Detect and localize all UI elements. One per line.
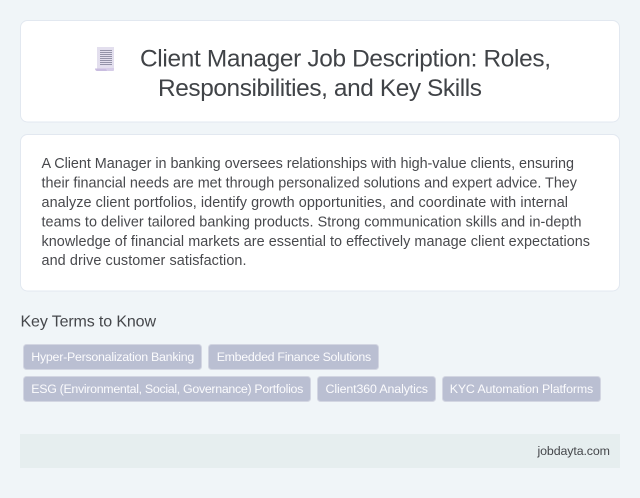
footer	[20, 434, 620, 468]
tag: Hyper-Personalization Banking	[24, 344, 202, 370]
tag: Client360 Analytics	[318, 376, 436, 402]
icon: document scroll	[95, 47, 114, 71]
panel: description	[20, 134, 620, 291]
tag: Hyper-Personalization Banking: Hyper-Personalization Banking	[31, 350, 194, 364]
text block: description	[42, 156, 590, 269]
text block: description: teams to deliver tailored banking products. Strong communication skills and in-depth	[42, 214, 582, 230]
tag: Embedded Finance Solutions: Embedded Finance Solutions	[217, 350, 371, 364]
tag: Embedded Finance Solutions	[208, 344, 378, 370]
text block: description: A Client Manager in banking oversees relationships with high-value clients, ensuring	[42, 156, 574, 172]
text block: description: knowledge of financial markets are essential to effectively manage client expectations	[42, 234, 590, 250]
heading: key terms: Key Terms to Know	[20, 314, 156, 330]
panel: title card	[20, 20, 620, 122]
tag: Client360 Analytics: Client360 Analytics	[326, 382, 428, 396]
text block: description: and drive customer satisfaction.	[42, 253, 246, 269]
tag: ESG Portfolios: ESG (Environmental, Social, Governance) Portfolios	[31, 382, 303, 396]
title: Responsibilities, and Key Skills	[158, 75, 482, 102]
footer: jobdayta.com	[536, 444, 610, 458]
tag: ESG Portfolios	[24, 376, 310, 402]
text block: description: their financial needs are met through personalized solutions and expert advice. They	[42, 176, 578, 192]
tag: KYC Automation Platforms: KYC Automation Platforms	[450, 382, 593, 396]
text block: description: analyze client portfolios, identify growth opportunities, and coordinate with internal	[42, 195, 568, 211]
title: Client Manager Job Description: Roles,	[140, 46, 551, 72]
title	[140, 46, 551, 102]
tag: KYC Automation Platforms	[442, 376, 600, 402]
